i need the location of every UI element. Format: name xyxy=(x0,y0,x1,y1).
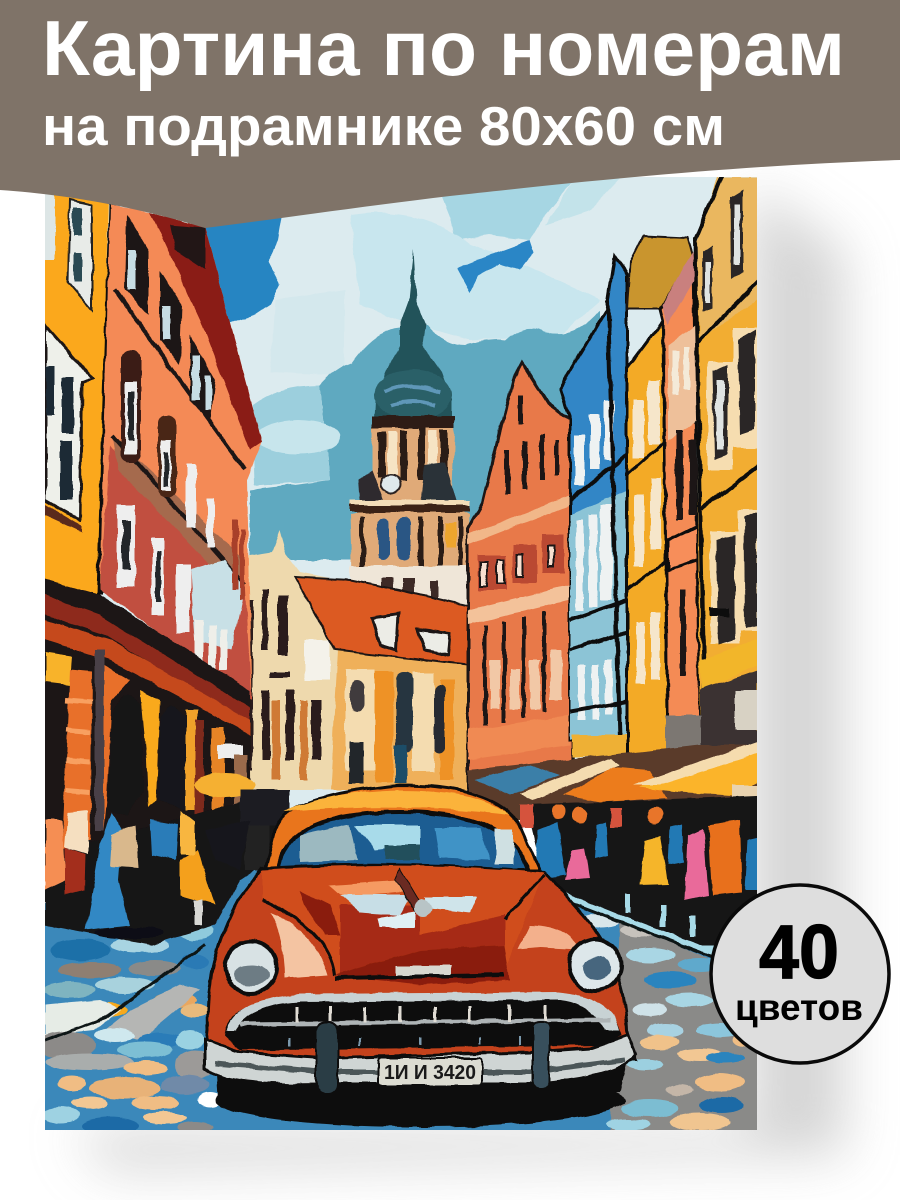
canvas shadow xyxy=(70,185,845,1170)
painting xyxy=(30,160,770,1145)
church and roof xyxy=(247,530,468,790)
left storefronts xyxy=(45,578,251,866)
subtitle: на подрамнике 80x60 см xyxy=(42,95,725,157)
sky xyxy=(100,177,757,808)
crowd left xyxy=(45,773,290,945)
car xyxy=(205,785,636,1127)
badge: 40 colours: 40 xyxy=(759,910,839,995)
header banner xyxy=(0,0,900,228)
street xyxy=(45,870,757,1130)
badge: 40 colours xyxy=(711,885,889,1063)
title: Картина по номерам xyxy=(42,4,845,92)
left red building xyxy=(100,205,262,700)
left yellow building xyxy=(45,194,116,595)
badge: 40 colours: цветов xyxy=(735,987,863,1028)
licence plate text: 1И И 3420 xyxy=(384,1062,476,1084)
crowd right xyxy=(520,795,770,945)
upper right buildings xyxy=(468,175,770,790)
clock tower xyxy=(350,250,470,608)
market awnings xyxy=(468,737,770,820)
